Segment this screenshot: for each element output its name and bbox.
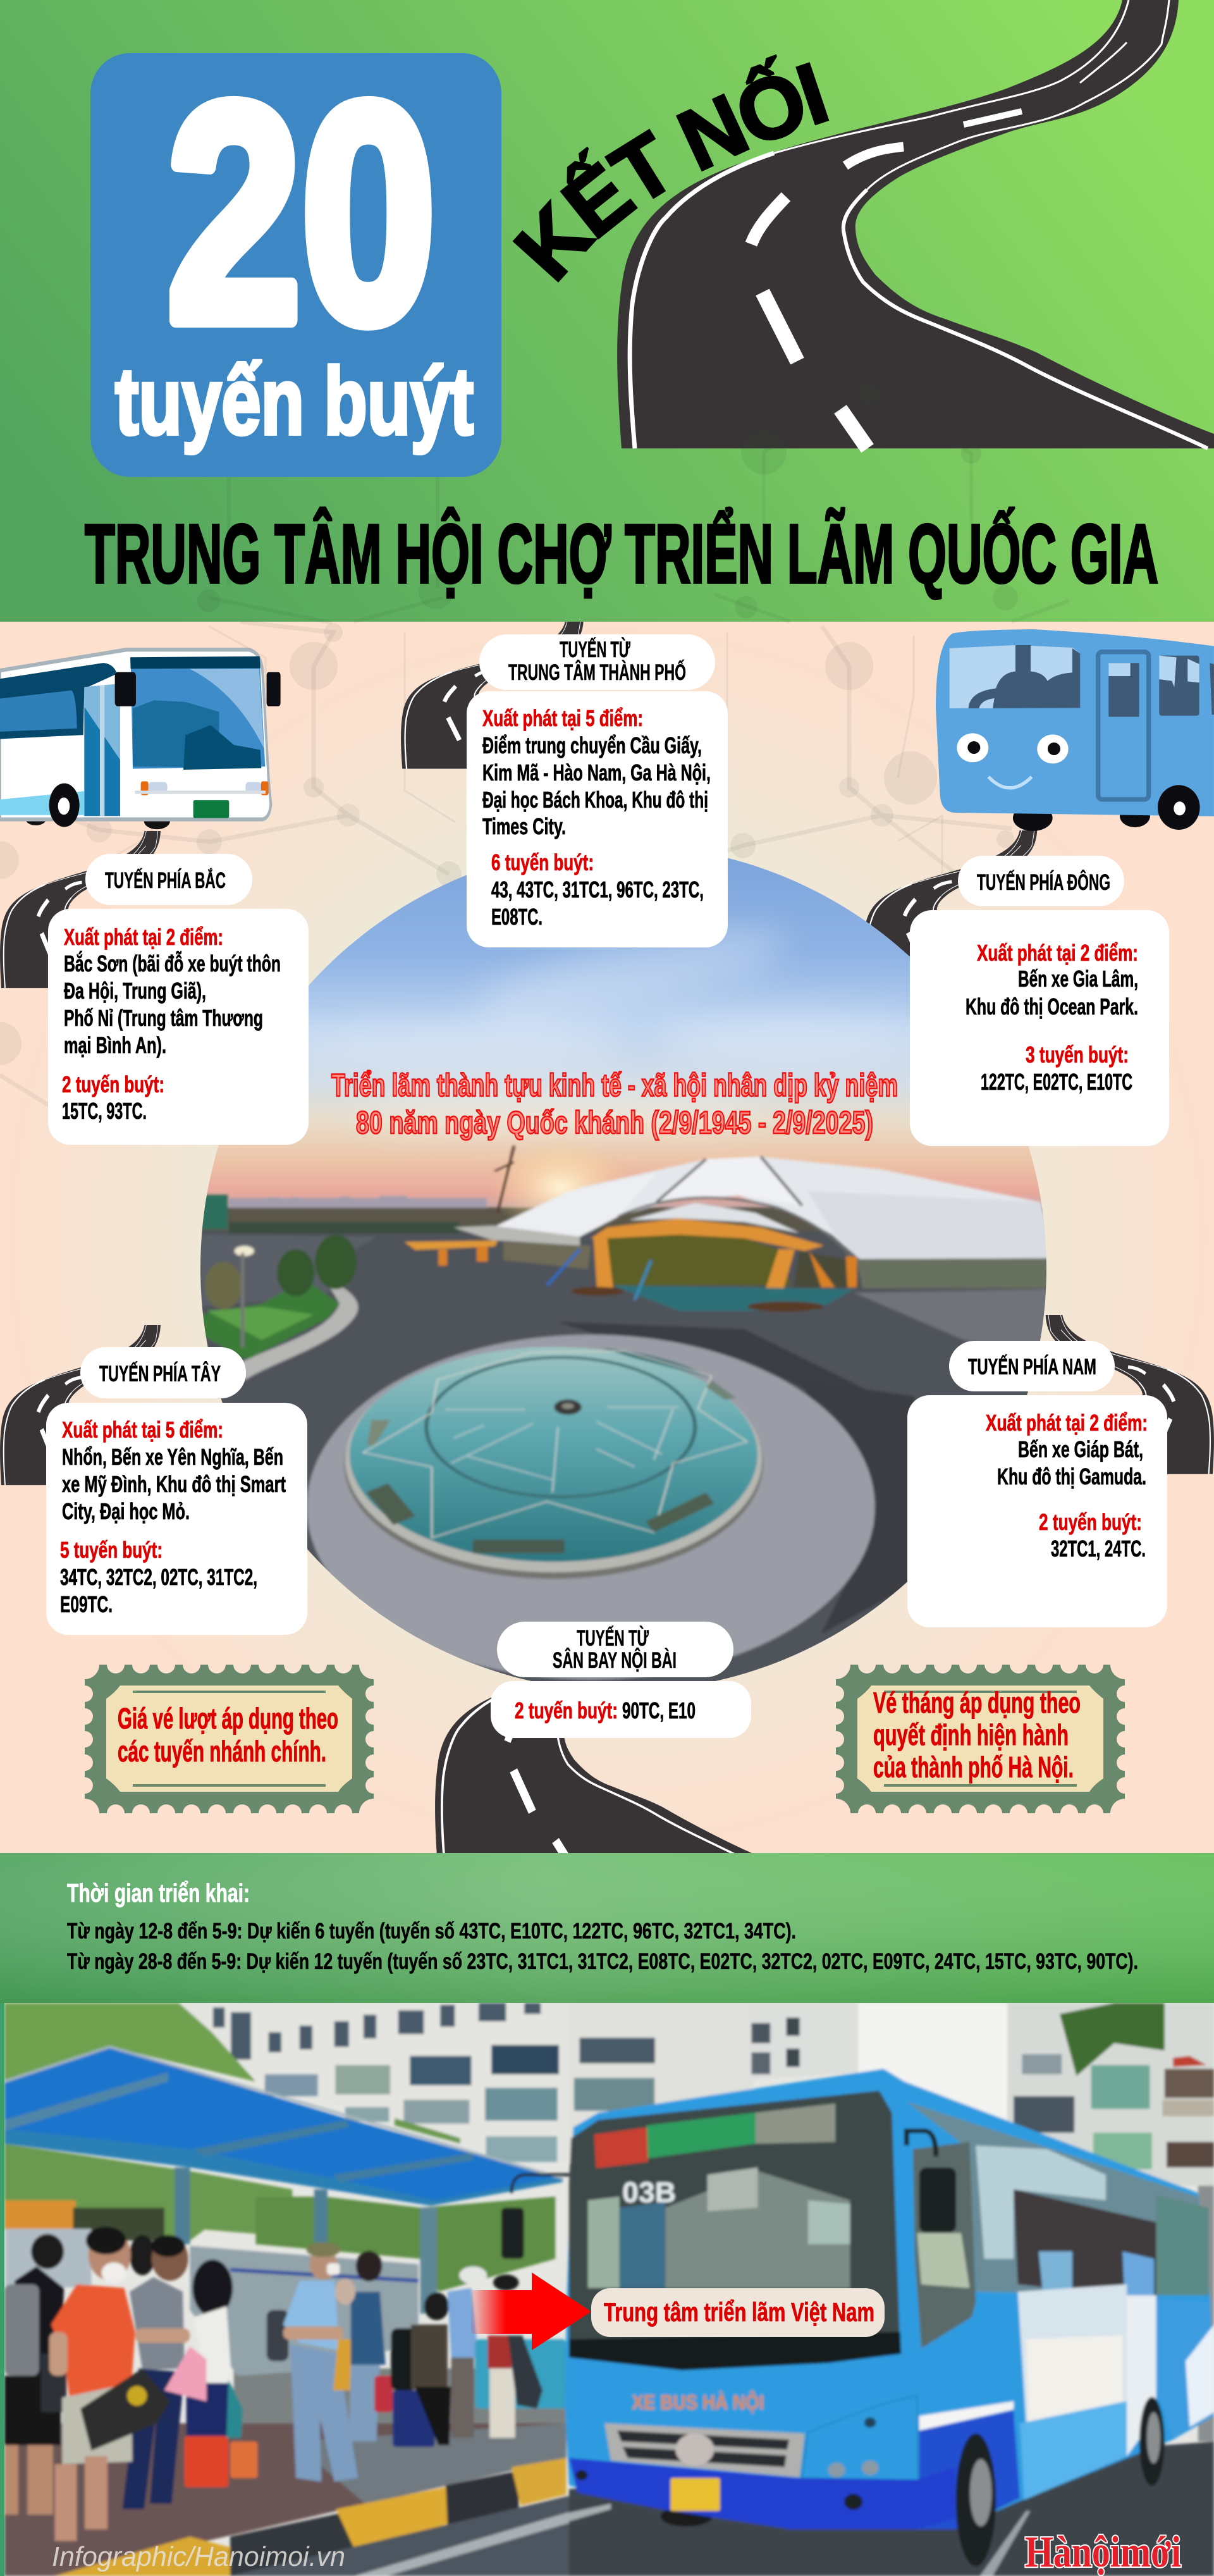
card: 2 tuyến buýt: bbox=[1039, 1509, 1142, 1535]
card: 6 tuyến buýt: bbox=[491, 849, 594, 875]
bus stop scene bbox=[4, 2003, 573, 2576]
card: Xuất phát tại 2 điểm: bbox=[977, 940, 1138, 966]
pill heading bbox=[497, 1622, 733, 1677]
bus scene: XE BUS HÀ NỘI bbox=[632, 2391, 764, 2414]
panel: tuyến phía bắc bbox=[48, 854, 309, 1145]
label tuyến buýt: tuyến buýt bbox=[115, 348, 474, 454]
pill heading: TUYẾN PHÍA BẮC bbox=[105, 868, 226, 893]
bus scene bbox=[565, 2003, 1214, 2576]
photo: exhibition centre circle bbox=[190, 841, 1068, 1703]
card bbox=[910, 910, 1169, 1146]
road illustration: header bbox=[617, 0, 1214, 448]
pill heading: SÂN BAY NỘI BÀI bbox=[553, 1648, 677, 1673]
card: E08TC. bbox=[491, 904, 543, 930]
card: 32TC1, 24TC. bbox=[1051, 1536, 1146, 1562]
caption: exhibition bbox=[331, 1068, 898, 1140]
caption: exhibition: 80 năm ngày Quốc khánh (2/9/1945 - 2/9/2025) bbox=[356, 1105, 873, 1140]
windscreen bbox=[569, 2091, 900, 2370]
panel: thời gian triển khai bbox=[0, 1853, 1214, 2003]
road: west bbox=[0, 1325, 171, 1485]
card: 122TC, E02TC, E10TC bbox=[981, 1069, 1132, 1095]
callout stamp: vé tháng: quyết định hiện hành bbox=[873, 1718, 1069, 1751]
card: 5 tuyến buýt: bbox=[60, 1537, 162, 1563]
pill heading: TUYẾN PHÍA NAM bbox=[968, 1354, 1096, 1379]
card: Nhổn, Bến xe Yên Nghĩa, Bến bbox=[62, 1444, 283, 1470]
road: airport bbox=[435, 1595, 757, 1864]
bus scene: 03B bbox=[622, 2177, 676, 2209]
logo: Hà Nội Mới: Hànộimới bbox=[1025, 2528, 1181, 2576]
ground bbox=[234, 2369, 567, 2441]
fountain disc bbox=[307, 1334, 875, 1679]
card: Khu đô thị Gamuda. bbox=[997, 1464, 1146, 1489]
card: Bến xe Gia Lâm, bbox=[1018, 966, 1138, 992]
wheels bbox=[955, 2434, 996, 2567]
card: Bến xe Giáp Bát, bbox=[1018, 1436, 1143, 1462]
panel: tuyến từ trung tâm thành phố bbox=[467, 634, 728, 947]
pill heading bbox=[85, 854, 252, 905]
panel: routes background bbox=[0, 622, 1214, 1853]
info boards bbox=[6, 2229, 91, 2288]
callout stamp: vé tháng: Vé tháng áp dụng theo bbox=[873, 1686, 1081, 1719]
bus body bbox=[565, 2069, 1214, 2529]
card: 2 tuyến buýt: bbox=[515, 1698, 618, 1723]
photo: bus stop and bus bbox=[0, 2003, 1214, 2576]
dark asphalt arc bbox=[563, 1322, 862, 1389]
card: Điểm trung chuyển Cầu Giấy, bbox=[482, 732, 702, 758]
garden and kerb bbox=[243, 1285, 360, 1381]
side windows bbox=[907, 2102, 1208, 2295]
card: 2 tuyến buýt: bbox=[62, 1071, 164, 1097]
schedule line 1: Từ ngày 12-8 đến 5-9: Dự kiến 6 tuyến (tuyến số 43TC, E10TC, 122TC, 96TC, 32TC1, 34TC). bbox=[67, 1919, 796, 1944]
panel: tuyến phía nam bbox=[907, 1341, 1167, 1627]
card: Đa Hội, Trung Giã), bbox=[64, 978, 206, 1004]
callout stamp: giá vé lượt bbox=[85, 1665, 374, 1813]
callout stamp: giá vé lượt: các tuyến nhánh chính. bbox=[118, 1735, 326, 1768]
icon: white coach bus bbox=[0, 650, 281, 829]
card: 34TC, 32TC2, 02TC, 31TC2, bbox=[60, 1564, 257, 1590]
ad panel bbox=[1014, 2190, 1156, 2299]
card: Xuất phát tại 5 điểm: bbox=[482, 705, 643, 731]
card: Khu đô thị Ocean Park. bbox=[966, 994, 1138, 1020]
card: City, Đại học Mỏ. bbox=[62, 1498, 190, 1524]
panel: tuyến phía tây bbox=[46, 1347, 307, 1635]
pill heading bbox=[80, 1347, 246, 1398]
card: Xuất phát tại 5 điểm: bbox=[62, 1417, 223, 1443]
card: 3 tuyến buýt: bbox=[1026, 1042, 1129, 1068]
people bbox=[4, 2227, 567, 2541]
road: north bbox=[0, 831, 171, 988]
card: Phố Nỉ (Trung tâm Thương bbox=[64, 1005, 263, 1031]
dome roof bbox=[577, 1156, 1038, 1258]
heading: Thời gian triển khai: bbox=[67, 1878, 250, 1907]
caption: exhibition: Triển lãm thành tựu kinh tế - xã hội nhân dịp kỷ niệm bbox=[331, 1068, 898, 1103]
card: 90TC, E10 bbox=[622, 1698, 696, 1723]
callout stamp: vé tháng: của thành phố Hà Nội. bbox=[873, 1751, 1074, 1784]
callout: trung tâm triển lãm bbox=[591, 2288, 885, 2337]
pill heading bbox=[949, 1341, 1115, 1391]
pill heading bbox=[479, 634, 715, 690]
card: Xuất phát tại 2 điểm: bbox=[986, 1410, 1148, 1436]
credit: Infographic/Hanoimoi.vn bbox=[52, 2541, 345, 2572]
front details bbox=[802, 2396, 918, 2480]
pill heading: TUYẾN TỪ bbox=[577, 1625, 649, 1651]
card bbox=[491, 1681, 751, 1738]
header background bbox=[0, 0, 1214, 622]
callout stamp: giá vé lượt: Giá vé lượt áp dụng theo bbox=[118, 1702, 338, 1735]
pill heading: TRUNG TÂM THÀNH PHỐ bbox=[508, 660, 686, 685]
card: Bắc Sơn (bãi đỗ xe buýt thôn bbox=[64, 950, 281, 977]
heading: KẾT NỐI: KẾT NỐI bbox=[512, 54, 830, 283]
card bbox=[46, 1403, 307, 1635]
card: Xuất phát tại 2 điểm: bbox=[64, 924, 223, 950]
card: 43, 43TC, 31TC1, 96TC, 23TC, bbox=[491, 877, 704, 903]
card: Kim Mã - Hào Nam, Ga Hà Nội, bbox=[482, 760, 711, 786]
card bbox=[907, 1395, 1167, 1627]
arrow bbox=[471, 2272, 591, 2350]
card bbox=[48, 909, 309, 1145]
number 20: 20 bbox=[167, 39, 436, 386]
pill heading bbox=[958, 856, 1124, 906]
road: east bbox=[863, 830, 1048, 987]
callout stamp: vé tháng bbox=[836, 1665, 1125, 1813]
callout: trung tâm triển lãm: Trung tâm triển lãm Việt Nam bbox=[604, 2297, 874, 2327]
card: Đại học Bách Khoa, Khu đô thị bbox=[482, 787, 708, 813]
shelter columns bbox=[175, 2167, 190, 2244]
card: mại Bình An). bbox=[64, 1032, 166, 1058]
icon: smiling blue bus bbox=[936, 629, 1214, 831]
rear wheels under bus bbox=[660, 2506, 713, 2527]
badge: 20 tuyến buýt bbox=[90, 39, 501, 477]
panel: tuyến từ sân bay nội bài bbox=[491, 1622, 751, 1738]
shelter roof bbox=[4, 2047, 563, 2206]
card: Times City. bbox=[482, 813, 566, 839]
pill heading: TUYẾN TỪ bbox=[560, 637, 631, 662]
road: south bbox=[1035, 1315, 1214, 1474]
card: 15TC, 93TC. bbox=[62, 1098, 147, 1124]
pill heading: TUYẾN PHÍA TÂY bbox=[99, 1361, 221, 1386]
lower side bbox=[919, 2401, 1014, 2431]
road: centre bbox=[401, 622, 595, 769]
card: E09TC. bbox=[60, 1591, 113, 1617]
pill heading: TUYẾN PHÍA ĐÔNG bbox=[977, 870, 1110, 895]
card bbox=[467, 691, 728, 947]
orange entrance arch bbox=[591, 1218, 824, 1251]
panel: tuyến phía đông bbox=[910, 856, 1169, 1146]
card: xe Mỹ Đình, Khu đô thị Smart bbox=[62, 1471, 286, 1497]
